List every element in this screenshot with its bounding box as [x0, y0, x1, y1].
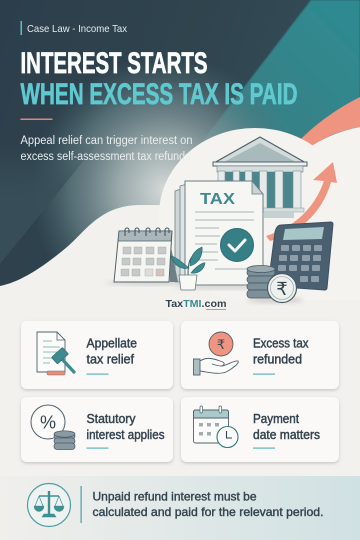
icon: document and gavel — [37, 332, 74, 375]
label: interest applies — [86, 428, 164, 442]
label — [86, 336, 137, 366]
label — [253, 412, 320, 442]
conclusion text: calculated and paid for the relevant period. — [92, 505, 324, 519]
conclusion text: Unpaid refund interest must be — [92, 490, 257, 504]
icon: hand with rupee coin — [194, 332, 238, 375]
label: Payment — [253, 412, 299, 426]
illustration: desk calendar — [105, 228, 195, 285]
icon: calendar and clock — [194, 406, 238, 448]
icon: hand with rupee coin: ₹ — [217, 338, 225, 353]
label: Statutory — [86, 412, 136, 426]
illustration: potted plant — [171, 247, 205, 290]
label: tax relief — [86, 352, 135, 366]
label — [253, 336, 309, 366]
illustration: coin stack and rupee coin — [247, 266, 303, 303]
title — [20, 47, 298, 111]
illustration: tax document — [175, 181, 275, 289]
panel: payment date matters — [181, 397, 339, 462]
hero circle backdrop — [159, 127, 360, 302]
illustration: coin stack and rupee coin: ₹ — [276, 279, 288, 300]
icon: percent and coins — [31, 405, 75, 450]
title: INTEREST STARTS — [20, 47, 208, 80]
icon: percent and coins: % — [40, 412, 56, 432]
illustration: rising arrow — [266, 162, 337, 241]
label: Excess tax — [253, 336, 309, 350]
label — [86, 412, 164, 442]
subtitle: Appeal relief can trigger interest on — [20, 135, 192, 147]
panel: appellate tax relief — [21, 321, 173, 389]
label: refunded — [253, 352, 302, 366]
subtitle: excess self-assessment tax refunds — [20, 151, 191, 163]
subtitle — [20, 135, 192, 163]
illustration: courthouse — [213, 137, 307, 218]
icon: scales of justice — [28, 484, 70, 526]
panel: conclusion band — [0, 476, 360, 540]
conclusion text — [92, 490, 324, 519]
logo: TaxTMI.com — [166, 298, 226, 310]
panel: excess tax refunded — [181, 321, 339, 389]
label: Appellate — [86, 336, 137, 350]
illustration: calculator — [268, 222, 333, 290]
title accent rule — [20, 118, 52, 120]
section tag: Case Law - Income Tax — [27, 23, 128, 35]
panel: statutory interest applies — [21, 397, 173, 462]
label: date matters — [253, 428, 320, 442]
illustration: tax document: TAX — [200, 191, 235, 208]
orange swoosh — [298, 97, 360, 147]
